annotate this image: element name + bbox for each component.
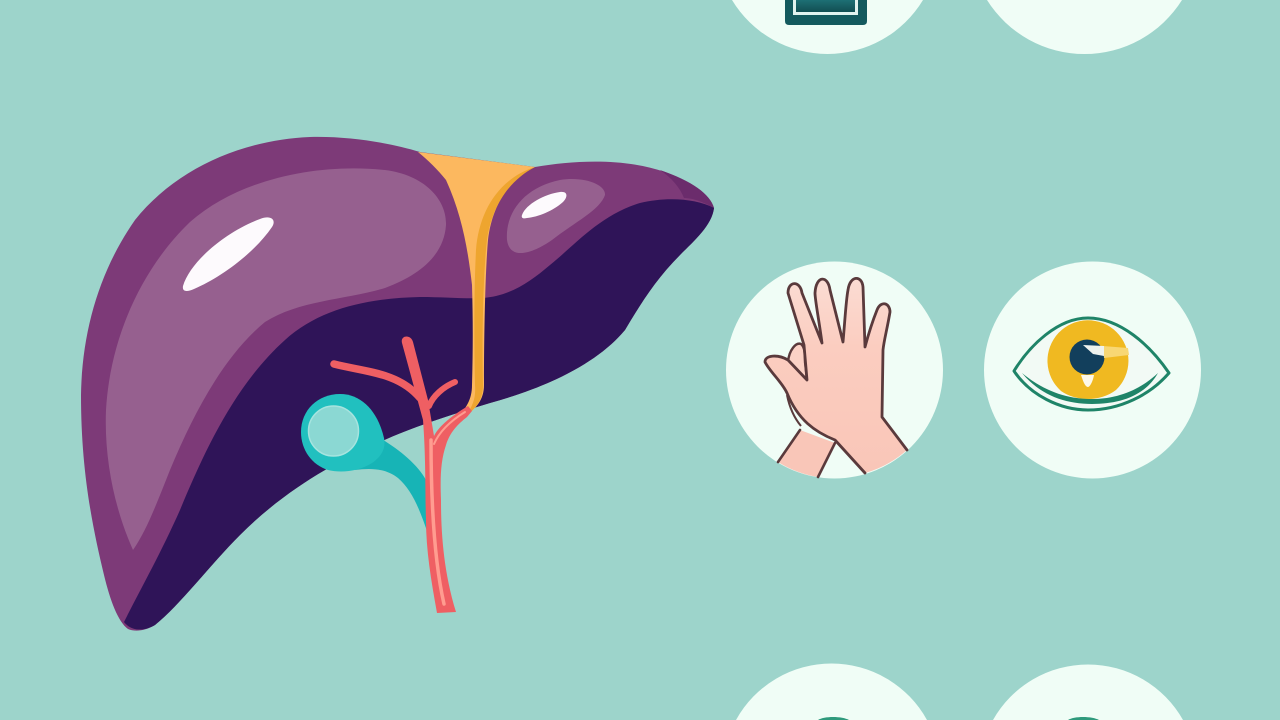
icon: partial green arc xyxy=(1068,717,1099,720)
liver: large highlight xyxy=(183,217,274,291)
liver: small highlight xyxy=(522,192,566,218)
liver: lighter right lobe sheen xyxy=(507,179,605,253)
icon: monitor xyxy=(785,0,867,25)
vessel: right branch xyxy=(429,382,455,406)
icon circle: bottom right xyxy=(993,664,1183,720)
bile ligament: darker edge xyxy=(466,167,535,416)
gallbladder xyxy=(301,394,384,472)
bile ligament xyxy=(418,152,535,420)
liver illustration xyxy=(81,137,714,631)
icon: eye glint white xyxy=(1083,345,1104,356)
icon: eye glint xyxy=(1103,346,1129,358)
liver: base lobe xyxy=(81,137,714,631)
icon: partial green arc xyxy=(818,717,849,720)
icon circle: blank (top right) xyxy=(987,0,1182,54)
vessel: trunk highlight xyxy=(431,440,444,604)
liver: right tip shade xyxy=(660,170,714,208)
icon circle: bottom left xyxy=(736,664,927,720)
gallbladder: inner circle xyxy=(308,406,358,456)
icon circle: scan (top left) xyxy=(732,0,923,54)
icon: iris xyxy=(1047,320,1128,399)
icon: tear xyxy=(1081,375,1094,387)
liver: dark underside xyxy=(124,199,714,630)
icon: pupil xyxy=(1070,340,1104,374)
vessel: bile connection highlight xyxy=(434,412,465,444)
icon circle: hands xyxy=(726,262,943,478)
liver: lighter left lobe sheen xyxy=(106,168,446,550)
gallbladder duct xyxy=(355,438,428,534)
icon circle: eye xyxy=(984,262,1201,478)
blood vessels xyxy=(334,336,472,613)
vessel: main trunk xyxy=(402,336,472,613)
icon: eye outline xyxy=(1014,318,1169,410)
icon: front hand xyxy=(765,278,907,473)
icon: back hand xyxy=(778,344,835,477)
icon: lower lid xyxy=(1022,373,1158,404)
vessel: left branch xyxy=(334,364,420,398)
